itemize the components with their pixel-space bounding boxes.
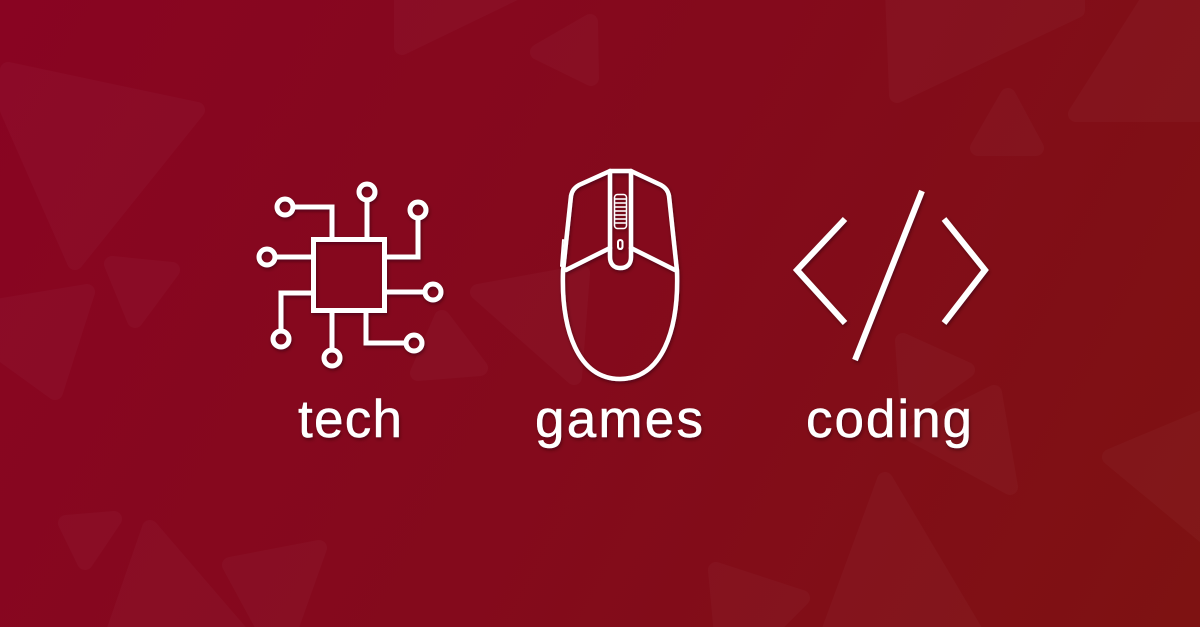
mouse body <box>563 171 677 379</box>
label: games: games <box>535 390 703 449</box>
scroll wheel <box>614 194 626 228</box>
chip square <box>314 240 384 310</box>
trace terminals <box>259 184 441 366</box>
mouse buttons divider <box>566 248 675 270</box>
labels <box>298 390 972 449</box>
icon: code brackets <box>797 191 985 360</box>
slash <box>855 191 922 360</box>
chip traces <box>276 201 424 349</box>
centre strip <box>610 171 631 268</box>
icon: computer mouse <box>561 171 677 379</box>
side buttons <box>561 240 563 266</box>
label: coding: coding <box>806 390 972 449</box>
left bracket <box>797 219 845 323</box>
right bracket <box>944 219 985 323</box>
icon: circuit chip <box>259 184 441 366</box>
label: tech: tech <box>298 390 402 449</box>
small button <box>618 240 622 249</box>
